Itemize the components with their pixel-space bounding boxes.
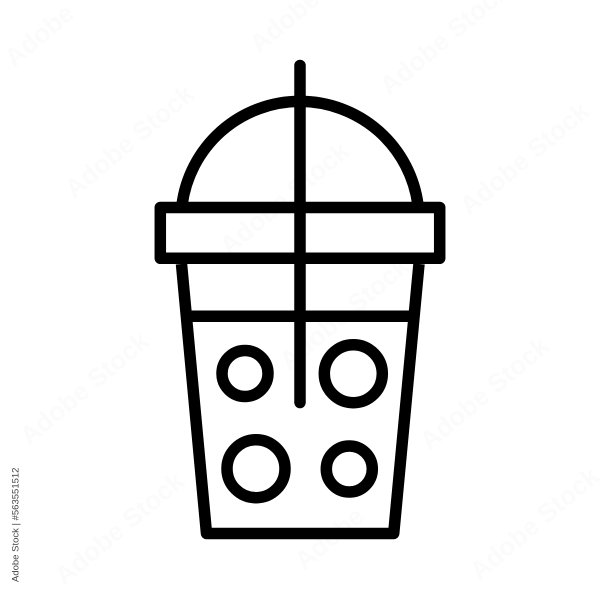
ice bubble bottom right bbox=[326, 446, 372, 492]
ice bubble bottom left bbox=[227, 440, 285, 498]
cup dome lid bbox=[182, 101, 418, 205]
icon: iced drink cup bbox=[160, 66, 440, 534]
cup body bbox=[182, 264, 419, 534]
watermark pattern: Adobe Stock bbox=[414, 330, 555, 456]
watermark pattern: Adobe Stock bbox=[274, 250, 415, 376]
watermark pattern: Adobe Stock bbox=[14, 325, 155, 451]
lid band bbox=[160, 208, 440, 258]
ice bubble top left bbox=[222, 350, 268, 396]
ice bubble top right bbox=[324, 345, 382, 403]
watermark pattern: Adobe Stock bbox=[214, 135, 355, 261]
watermark pattern: Adobe Stock bbox=[49, 465, 190, 591]
side stock credit: Adobe Stock | #563551512 bbox=[10, 468, 22, 582]
watermark pattern: Adobe bbox=[289, 501, 370, 576]
straw bbox=[294, 66, 306, 402]
liquid level line bbox=[186, 311, 414, 322]
watermark pattern: Adobe Stock bbox=[59, 78, 200, 204]
watermark pattern: Adobe Stock bbox=[454, 95, 595, 221]
